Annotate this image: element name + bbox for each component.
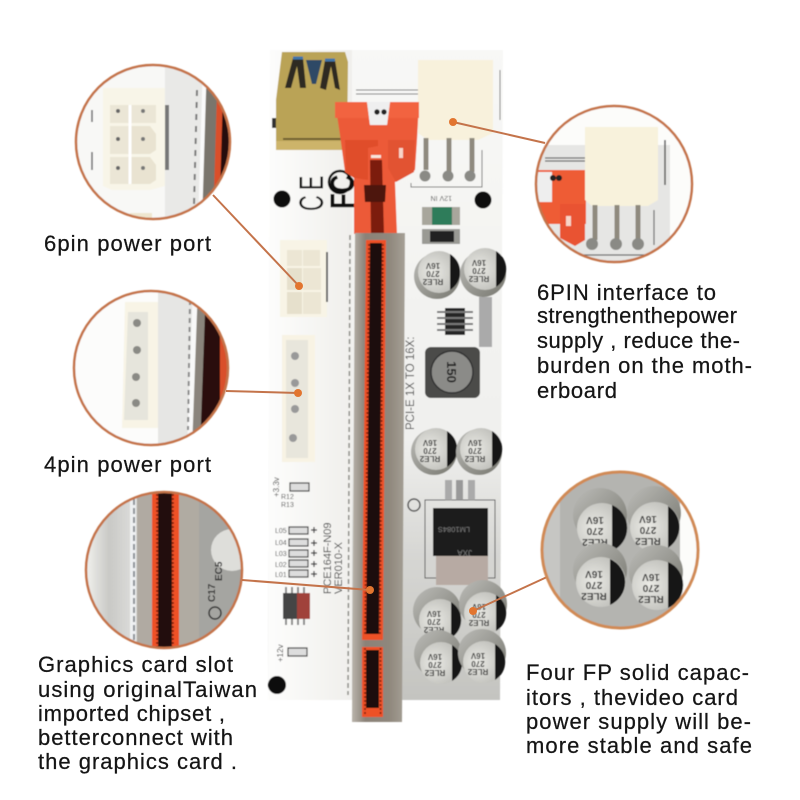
- capacitor pair upper: 270: [472, 266, 486, 275]
- CE and FCC marks: FC: [325, 175, 362, 209]
- four solid capacitors: 16V: [471, 602, 486, 611]
- magnifier: 6pin power port: [76, 60, 240, 225]
- text block: solid capacitors: more stable and safe: [526, 733, 752, 758]
- capacitor pair middle: 270: [468, 446, 482, 455]
- four solid capacitors: 16V: [427, 652, 442, 661]
- magnifier: four solid capacitors: 16V: [642, 571, 660, 582]
- text block: 6PIN interface: strengthenthepower: [537, 303, 737, 328]
- inductor: [425, 347, 480, 398]
- four solid capacitors: RLE2: [423, 625, 444, 634]
- magnifier: four solid capacitors: 16V: [585, 568, 603, 579]
- board silkscreen labels: L01: [275, 572, 287, 579]
- CE and FCC marks: [274, 171, 492, 211]
- magnifier: four solid capacitors: 270: [639, 524, 656, 535]
- capacitor pair upper: 270: [426, 269, 440, 278]
- magnifier: upper 6PIN interface: [536, 100, 700, 270]
- callout lines and dots: [213, 118, 547, 615]
- magnifier: four solid capacitors: 270: [585, 579, 602, 590]
- four solid capacitors: 16V: [470, 651, 485, 660]
- four solid capacitors: RLE2: [467, 667, 488, 676]
- label: 6pin power port: 6pin power port: [44, 231, 211, 256]
- four solid capacitors: 270: [428, 660, 442, 669]
- board: [268, 50, 503, 700]
- fuse and diode: [422, 207, 460, 244]
- text block: solid capacitors: Four FP solid capac-: [526, 660, 749, 685]
- USB port: [272, 52, 348, 150]
- text block: 6PIN interface: [537, 280, 752, 403]
- LM regulator: LM1084S: [438, 525, 470, 534]
- magnifier: graphics card slot: C17: [207, 583, 218, 602]
- line: 6pin port: [213, 195, 299, 286]
- capacitor pair middle: RLE2: [419, 454, 440, 463]
- CE and FCC marks: CE: [293, 171, 331, 211]
- line: capacitors: [473, 577, 547, 611]
- LM regulator: [425, 480, 495, 585]
- board silkscreen labels: [268, 336, 420, 694]
- board silkscreen labels: +12v: [276, 644, 285, 662]
- text block: solid capacitors: power supply will be-: [526, 709, 751, 734]
- four solid capacitors: RLE2: [468, 618, 489, 627]
- capacitor pair middle: RLE2: [464, 454, 485, 463]
- magnifier: four solid capacitors: RLE2: [582, 536, 608, 547]
- label: 4pin power port: 4pin power port: [44, 452, 211, 477]
- magnifier: four solid capacitors: RLE2: [635, 535, 661, 546]
- magnifier: four solid capacitors: 16V: [639, 513, 657, 524]
- four solid capacitors: [413, 580, 507, 684]
- board silkscreen labels: L02: [275, 562, 287, 569]
- text block: 6PIN interface: supply , reduce the-: [537, 328, 740, 353]
- board silkscreen labels: L03: [275, 551, 287, 558]
- capacitor pair upper: RLE2: [468, 274, 489, 283]
- board silkscreen labels: L04: [275, 540, 287, 547]
- four solid capacitors: 270: [427, 617, 441, 626]
- text block: graphics card slot: imported chipset ,: [38, 701, 225, 726]
- board silkscreen labels: PCE164F-N09: [322, 522, 334, 594]
- capacitor pair upper: 16V: [471, 258, 486, 267]
- upper 6-pin connector: [356, 60, 500, 201]
- U2 chip: [437, 297, 492, 347]
- board silkscreen labels: VER010-X: [333, 541, 345, 594]
- text block: graphics card slot: Graphics card slot: [38, 652, 233, 677]
- capacitor pair middle: [411, 428, 502, 475]
- magnifier: four solid capacitors: [540, 470, 705, 640]
- text block: 6PIN interface: erboard: [537, 378, 617, 403]
- text block: 6PIN interface: 6PIN interface to: [537, 280, 716, 305]
- 4-pin power port: [282, 335, 315, 462]
- four solid capacitors: 270: [472, 610, 486, 619]
- upper 6-pin connector: 12V IN: [431, 194, 452, 201]
- capacitor pair middle: 16V: [422, 438, 437, 447]
- red latch: [335, 102, 419, 234]
- board silkscreen labels: +3.3v: [272, 477, 281, 497]
- line: upper connector: [453, 122, 545, 143]
- text block: graphics card slot: betterconnect with: [38, 725, 233, 750]
- text block: 6PIN interface: burden on the moth-: [537, 353, 752, 378]
- PCI-E slot: [348, 233, 405, 722]
- text block: graphics card slot: [38, 652, 257, 774]
- magnifier: four solid capacitors: RLE2: [638, 593, 664, 604]
- four solid capacitors: 16V: [426, 609, 441, 618]
- magnifier: four solid capacitors: 270: [642, 582, 659, 593]
- text block: graphics card slot: the graphics card .: [38, 749, 237, 774]
- LM regulator: JXA: [457, 548, 472, 557]
- four solid capacitors: RLE2: [424, 668, 445, 677]
- line: graphics slot: [242, 580, 370, 590]
- magnifier: four solid capacitors: 16V: [586, 514, 604, 525]
- magnifier: graphics card slot: [84, 490, 253, 650]
- capacitor pair middle: 270: [423, 446, 437, 455]
- capacitor pair upper: 16V: [425, 261, 440, 270]
- riser card board photo: [268, 50, 507, 722]
- capacitor pair middle: 16V: [467, 438, 482, 447]
- board silkscreen labels: PCI-E 1X TO 16X:: [405, 336, 417, 430]
- magnifier: four solid capacitors: 270: [586, 525, 603, 536]
- text block: solid capacitors: [526, 660, 752, 758]
- magnifier: 4pin power port: [74, 285, 240, 450]
- magnifier: four solid capacitors: RLE2: [581, 590, 607, 601]
- inductor: 150: [444, 361, 459, 383]
- text block: graphics card slot: using originalTaiwan: [38, 677, 257, 702]
- capacitor pair upper: [414, 248, 506, 299]
- text block: solid capacitors: itors , thevideo card: [526, 685, 738, 710]
- magnifier: graphics card slot: EC5: [214, 561, 225, 581]
- board silkscreen labels: R13: [281, 502, 294, 509]
- four solid capacitors: 270: [471, 659, 485, 668]
- capacitor pair upper: RLE2: [422, 277, 443, 286]
- board silkscreen labels: R12: [281, 494, 294, 501]
- lower 6-pin power port: [280, 240, 328, 317]
- line: 4pin port: [226, 391, 298, 393]
- board silkscreen labels: L05: [275, 528, 287, 535]
